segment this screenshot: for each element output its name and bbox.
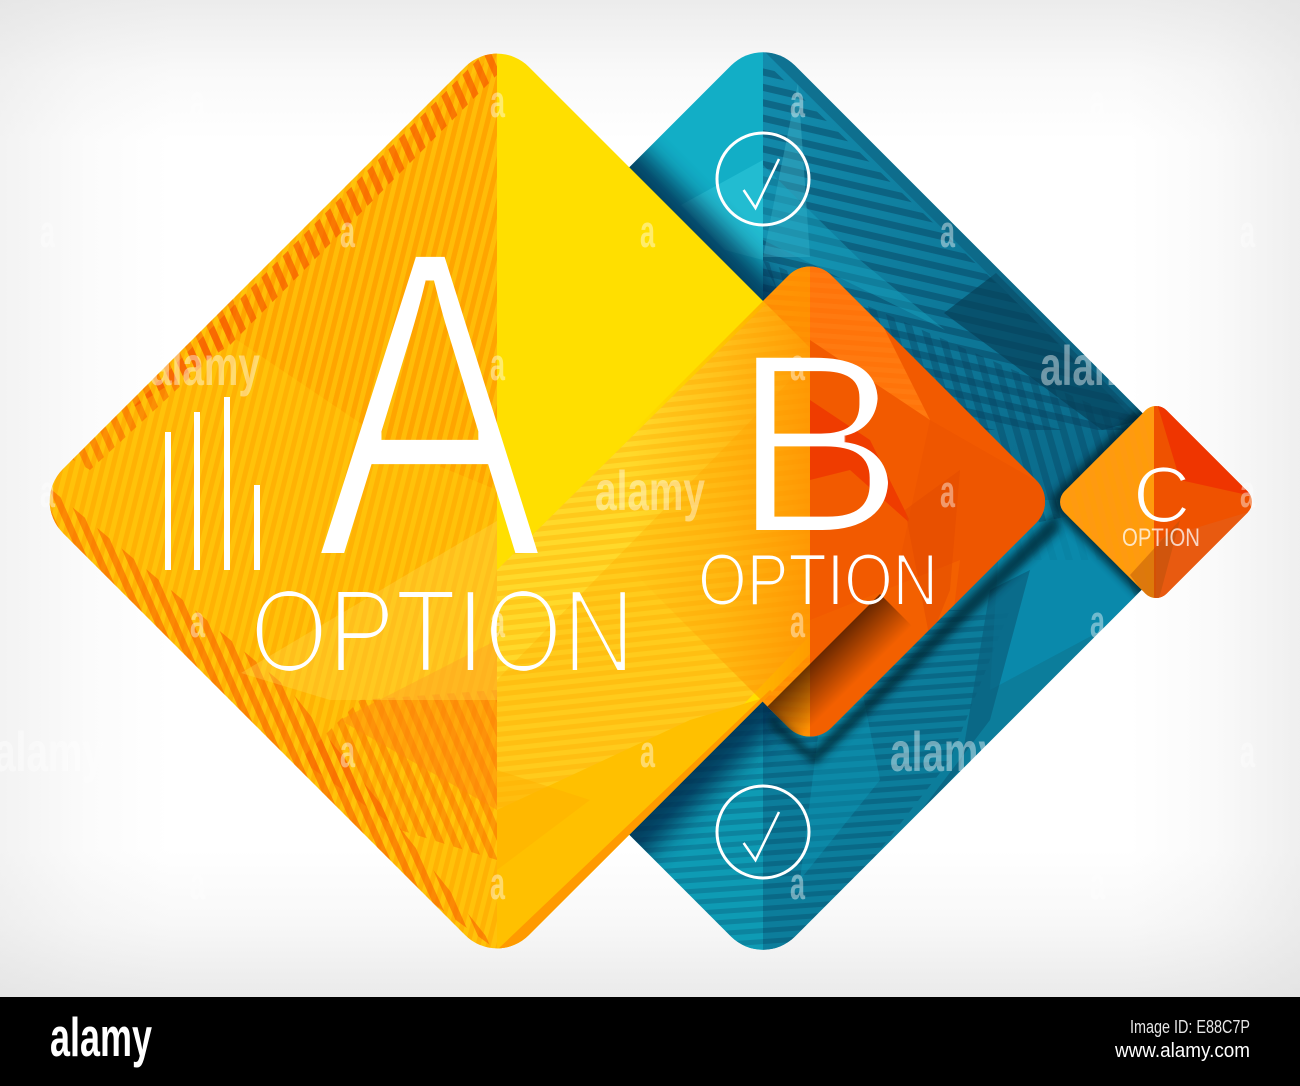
panel: A diamond	[50, 54, 810, 948]
shadow of B diamond	[770, 512, 1060, 765]
bar chart icon	[165, 397, 260, 570]
watermarks: a	[1240, 206, 1256, 257]
heading: letter C: C	[1133, 450, 1191, 539]
watermarks: a	[490, 858, 506, 909]
yellow edge shade on B	[766, 594, 912, 740]
watermarks: a	[790, 339, 806, 390]
label: option A: OPTION	[250, 565, 635, 698]
shadow of A diamond	[629, 140, 790, 865]
watermarks: a	[190, 76, 206, 127]
heading: letter B: B	[732, 299, 905, 588]
footer bar	[0, 997, 1300, 1086]
icon: bottom check circle	[717, 786, 809, 878]
watermarks: a	[340, 206, 356, 257]
watermarks: a	[940, 466, 956, 517]
watermarks: a	[490, 596, 506, 647]
watermarks: a	[490, 339, 506, 390]
label: option B: OPTION	[698, 540, 938, 621]
panel: B diamond under layer	[762, 266, 810, 736]
watermarks: a	[40, 466, 56, 517]
watermarks: a	[190, 596, 206, 647]
panel: B diamond blend over A	[658, 266, 810, 736]
watermarks: a	[1240, 726, 1256, 777]
watermarks	[0, 76, 1256, 909]
watermarks: a	[790, 76, 806, 127]
footer url: www.alamy.com	[1114, 1040, 1250, 1062]
watermarks: alamy	[595, 459, 705, 522]
panel: C diamond	[1060, 406, 1252, 598]
panel: B diamond front	[768, 266, 1046, 736]
watermarks: a	[1090, 596, 1106, 647]
watermarks: a	[1090, 858, 1106, 909]
heading: letter A: A	[314, 157, 547, 651]
watermarks: a	[940, 206, 956, 257]
footer image id: Image ID: E88C7P	[1130, 1017, 1250, 1037]
icon: top check circle	[717, 133, 809, 225]
watermarks: a	[640, 206, 656, 257]
panel: teal diamond	[629, 52, 1143, 950]
watermarks: a	[190, 858, 206, 909]
watermarks: alamy	[150, 334, 260, 397]
watermarks: alamy	[1040, 334, 1150, 397]
footer logo: alamy	[50, 1006, 152, 1068]
watermarks: a	[640, 726, 656, 777]
watermarks: a	[490, 76, 506, 127]
label: option C: OPTION	[1122, 524, 1200, 552]
shadow of C diamond	[1046, 406, 1142, 598]
watermarks: a	[1240, 466, 1256, 517]
watermarks: a	[340, 726, 356, 777]
watermarks: a	[790, 858, 806, 909]
watermarks: a	[40, 206, 56, 257]
watermarks: alamy	[890, 720, 1000, 783]
watermarks: a	[1090, 76, 1106, 127]
watermarks: a	[790, 596, 806, 647]
